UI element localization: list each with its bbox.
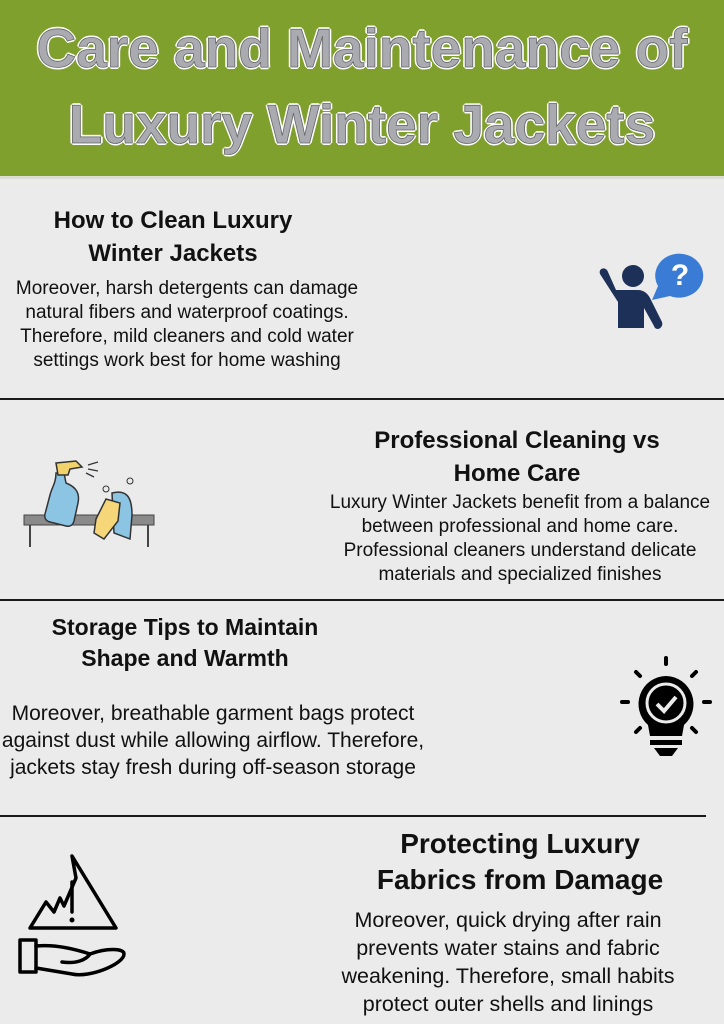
heading: professional cleaning: Home Care <box>454 460 580 487</box>
text: professional cleaning: between professional and home care. <box>362 516 678 537</box>
text: how to clean: Therefore, mild cleaners and cold water <box>20 326 354 347</box>
heading: how to clean <box>54 207 292 267</box>
text: how to clean: Moreover, harsh detergents can damage <box>16 278 358 299</box>
heading: protecting fabrics: Protecting Luxury <box>400 828 640 859</box>
text: how to clean: natural fibers and waterproof coatings. <box>25 302 349 323</box>
text: professional cleaning <box>330 492 710 585</box>
title <box>36 17 690 156</box>
text: protecting fabrics <box>341 908 675 1016</box>
heading: storage tips: Shape and Warmth <box>81 645 289 671</box>
icon: person with question <box>600 254 704 329</box>
text: how to clean <box>16 278 358 371</box>
title: Care and Maintenance of <box>36 17 687 79</box>
icon: hand with warning <box>18 854 126 976</box>
text: protecting fabrics: Moreover, quick drying after rain <box>354 908 662 932</box>
text: professional cleaning: Professional cleaners understand delicate <box>344 540 696 561</box>
text: storage tips: against dust while allowing airflow. Therefore, <box>2 729 424 752</box>
text: how to clean: settings work best for home washing <box>33 350 341 371</box>
heading: professional cleaning: Professional Cleaning vs <box>374 427 660 454</box>
text: storage tips <box>2 702 424 779</box>
icon: person with question: ? <box>671 259 689 292</box>
text: professional cleaning: Luxury Winter Jackets benefit from a balance <box>330 492 710 513</box>
title: Luxury Winter Jackets <box>69 93 655 155</box>
title banner <box>0 0 724 176</box>
heading: protecting fabrics <box>377 828 663 895</box>
text: protecting fabrics: prevents water stains and fabric <box>356 936 660 960</box>
text: storage tips: jackets stay fresh during off-season storage <box>10 756 416 779</box>
heading: storage tips: Storage Tips to Maintain <box>52 614 318 640</box>
icon: cleaning spray <box>24 460 154 547</box>
heading: how to clean: Winter Jackets <box>88 240 258 267</box>
heading: storage tips <box>52 614 318 671</box>
text: storage tips: Moreover, breathable garment bags protect <box>12 702 414 725</box>
heading: professional cleaning <box>374 427 660 487</box>
text: protecting fabrics: protect outer shells and linings <box>363 992 653 1016</box>
text: protecting fabrics: weakening. Therefore, small habits <box>341 964 675 988</box>
text: professional cleaning: materials and specialized finishes <box>378 564 662 585</box>
heading: protecting fabrics: Fabrics from Damage <box>377 864 663 895</box>
icon: lightbulb with check <box>620 656 712 756</box>
heading: how to clean: How to Clean Luxury <box>54 207 292 234</box>
